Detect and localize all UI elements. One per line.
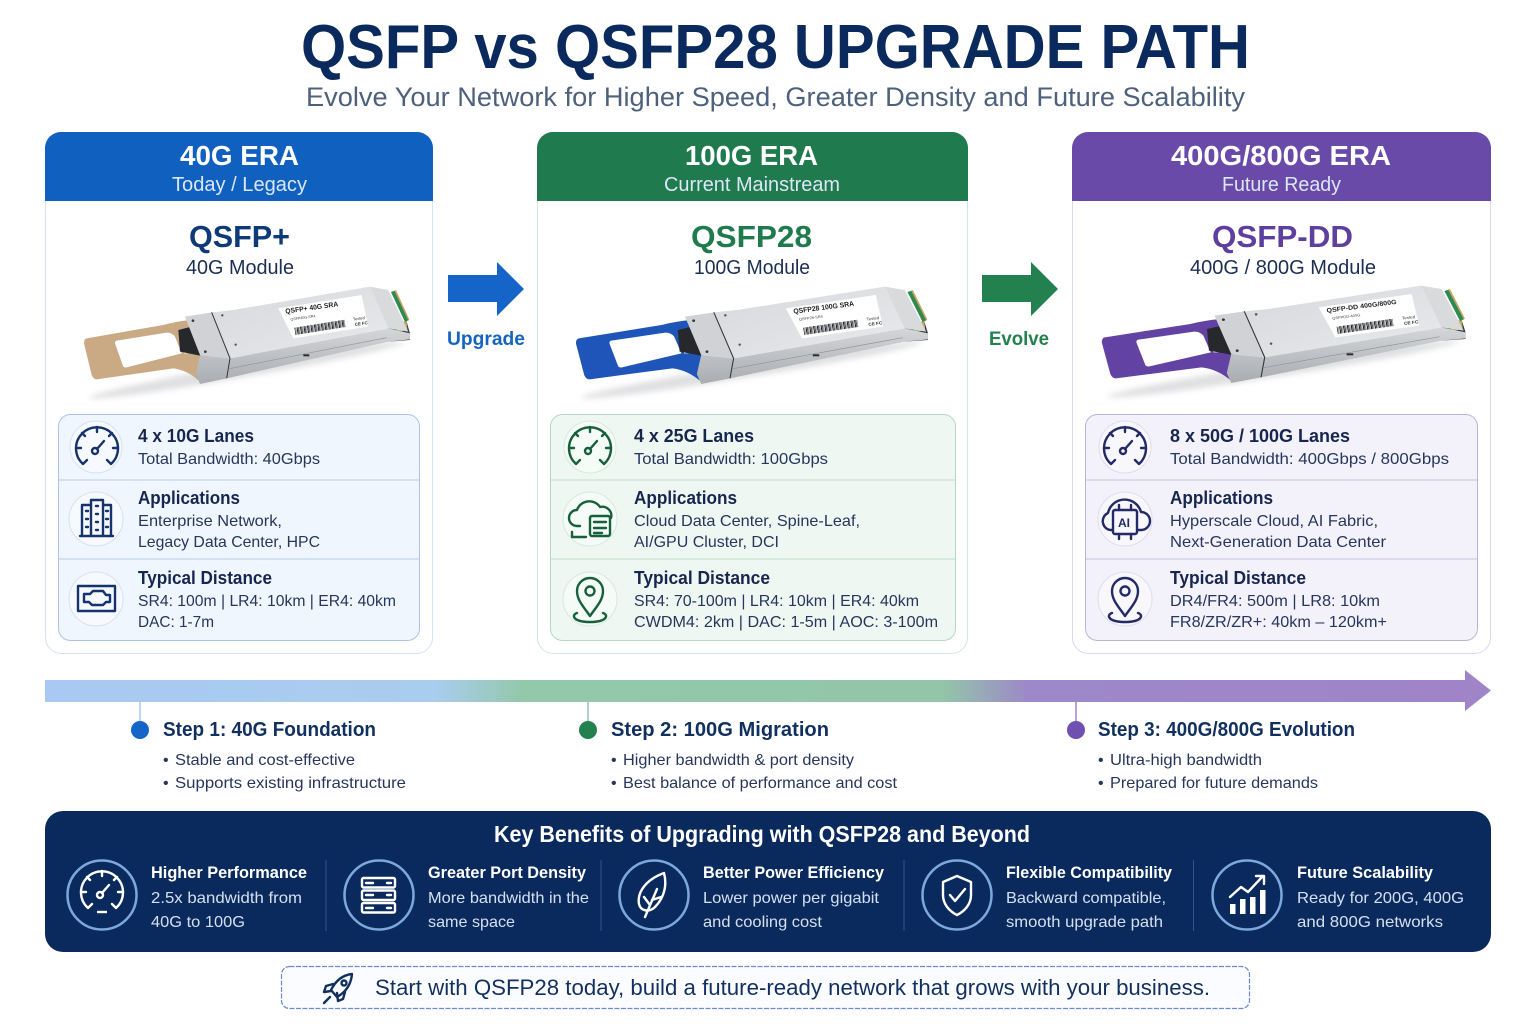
lanes text (1170, 426, 1449, 468)
title: QSFP vs QSFP28 UPGRADE PATH (301, 13, 1250, 82)
icon: circuit board (69, 572, 123, 626)
distance text: SR4: 100m | LR4: 10km | ER4: 40km (138, 593, 396, 610)
step 3: Ultra-high bandwidth (1110, 752, 1262, 769)
module type: 100G Module (694, 257, 810, 279)
module image: QSFP+ (84, 287, 410, 404)
step 2: Higher bandwidth & port density (623, 752, 854, 769)
applications text: Enterprise Network, (138, 513, 282, 530)
step 3: • (1098, 775, 1104, 792)
benefit: flexible compatibility (922, 860, 1173, 931)
benefit: higher performance: Higher Performance (151, 863, 307, 882)
timeline arrow (45, 670, 1491, 711)
lanes text (138, 426, 320, 468)
applications text: Next-Generation Data Center (1170, 534, 1387, 551)
lanes text: Total Bandwidth: 400Gbps / 800Gbps (1170, 451, 1449, 468)
icon: buildings (69, 492, 123, 546)
panel: 100G era (537, 132, 968, 654)
distance text: Typical Distance (634, 568, 770, 588)
callout: call to action (282, 966, 1250, 1008)
header: 100G era (537, 132, 968, 201)
applications text: AI/GPU Cluster, DCI (634, 534, 779, 551)
benefit: higher performance: 2.5x bandwidth from (151, 890, 302, 907)
step 1 (131, 702, 406, 792)
step 2: • (611, 775, 617, 792)
icon: cloud server (563, 492, 617, 546)
distance text: Typical Distance (1170, 568, 1306, 588)
lanes text: Total Bandwidth: 100Gbps (634, 451, 828, 468)
module name: QSFP+: QSFP+ (189, 219, 290, 254)
header: 40G era (45, 132, 433, 201)
step 2: • (611, 752, 617, 769)
lanes text: 4 x 25G Lanes (634, 426, 754, 446)
applications text: Applications (634, 488, 737, 508)
step 1: • (163, 775, 169, 792)
distance text (1170, 568, 1387, 631)
step 2: Best balance of performance and cost (623, 775, 898, 792)
distance text: SR4: 70-100m | LR4: 10km | ER4: 40km (634, 593, 919, 610)
specs: 100G (550, 414, 956, 640)
arrow: upgrade: Upgrade (447, 329, 525, 350)
step 1: Stable and cost-effective (175, 752, 355, 769)
header: 400G/800G era: Future Ready (1222, 174, 1341, 196)
benefit: greater port density: Greater Port Density (428, 863, 587, 882)
distance text: DR4/FR4: 500m | LR8: 10km (1170, 593, 1380, 610)
step 2 (579, 702, 898, 792)
distance text: FR8/ZR/ZR+: 40km – 120km+ (1170, 614, 1387, 631)
distance text (634, 568, 938, 631)
module image: QSFP-DD: QSFP-DD 400G/800G (1326, 299, 1397, 315)
benefit: flexible compatibility: smooth upgrade path (1006, 914, 1163, 931)
header: 40G era: 40G ERA (180, 140, 299, 171)
applications text: Applications (1170, 488, 1273, 508)
benefit: future scalability: Ready for 200G, 400G (1297, 890, 1464, 907)
arrow: evolve (982, 262, 1058, 350)
benefit: higher performance: 40G to 100G (151, 914, 245, 931)
benefit: better power efficiency: Lower power per gigabit (703, 890, 880, 907)
panel: 400G/800G era (1072, 132, 1491, 654)
benefit: better power efficiency: Better Power Efficiency (703, 863, 885, 882)
header: 400G/800G era (1072, 132, 1491, 201)
step 2: Step 2: 100G Migration (611, 719, 829, 741)
module type: 400G / 800G Module (1190, 257, 1376, 279)
distance text: CWDM4: 2km | DAC: 1-5m | AOC: 3-100m (634, 614, 938, 631)
module image: QSFP28 (576, 287, 928, 404)
header: 100G era: Current Mainstream (664, 174, 840, 196)
lanes text (634, 426, 828, 468)
module image: QSFP-DD: QSFPDD-400G (1332, 312, 1361, 321)
benefit: better power efficiency (620, 860, 885, 931)
icon: rocket (324, 974, 352, 1003)
benefit: future scalability: Future Scalability (1297, 863, 1434, 882)
module image: QSFP+: QSFP40G-SR4 (290, 314, 316, 322)
benefits heading: Key Benefits of Upgrading with QSFP28 and Beyond (494, 821, 1030, 847)
distance text: Typical Distance (138, 568, 272, 588)
applications text: Applications (138, 488, 240, 508)
module image: QSFP28: QSFP28-SR4 (799, 315, 823, 322)
module image: QSFP28: Tested (866, 315, 880, 322)
benefit: greater port density: same space (428, 914, 515, 931)
icon: gauge (564, 421, 616, 473)
module image: QSFP+: Tested (353, 315, 365, 322)
arrow: evolve: Evolve (989, 329, 1049, 350)
lanes text: Total Bandwidth: 40Gbps (138, 451, 320, 468)
benefit: flexible compatibility: Backward compatible, (1006, 890, 1166, 907)
applications text (138, 488, 320, 551)
header: 400G/800G era: 400G/800G ERA (1171, 140, 1391, 171)
applications text: Hyperscale Cloud, AI Fabric, (1170, 513, 1378, 530)
benefit: flexible compatibility: Flexible Compatibility (1006, 863, 1173, 882)
module image: QSFP-DD: Tested (1402, 314, 1416, 321)
benefit: better power efficiency: and cooling cost (703, 914, 823, 931)
step 1: Step 1: 40G Foundation (163, 719, 376, 741)
applications text (634, 488, 860, 551)
module image: QSFP+: CE FC (354, 320, 368, 327)
module name: QSFP-DD: QSFP-DD (1212, 219, 1353, 254)
lanes text: 8 x 50G / 100G Lanes (1170, 426, 1350, 446)
applications text: Cloud Data Center, Spine-Leaf, (634, 513, 860, 530)
specs: 400G/800G (1086, 414, 1478, 640)
step 1: • (163, 752, 169, 769)
benefit: greater port density: More bandwidth in the (428, 890, 589, 907)
module image: QSFP+: QSFP+ 40G SRA (285, 301, 339, 316)
benefit: future scalability (1212, 860, 1464, 931)
module image: QSFP28: QSFP28 100G SRA (793, 299, 855, 316)
step 1: Supports existing infrastructure (175, 775, 406, 792)
specs: 40G (58, 414, 420, 640)
call to action text: Start with QSFP28 today, build a future-ready network that grows with your business. (375, 975, 1210, 1000)
distance text: DAC: 1-7m (138, 614, 214, 631)
arrow: upgrade (447, 262, 525, 350)
step 3 (1067, 702, 1355, 792)
icon: location pin (563, 572, 617, 626)
benefit: higher performance (68, 860, 307, 931)
header: 40G era: Today / Legacy (172, 174, 307, 196)
icon: AI cloud: AI (1118, 516, 1130, 530)
icon: gauge (70, 421, 122, 473)
benefit: greater port density (344, 860, 589, 931)
applications text: Legacy Data Center, HPC (138, 534, 320, 551)
panel: 40G era (45, 132, 433, 654)
icon: location pin (1098, 572, 1152, 626)
icon: gauge (1099, 421, 1151, 473)
header: 100G era: 100G ERA (685, 140, 818, 171)
step 3: Prepared for future demands (1110, 775, 1318, 792)
icon: AI cloud (1098, 492, 1152, 546)
step 3: Step 3: 400G/800G Evolution (1098, 719, 1355, 741)
applications text (1170, 488, 1387, 551)
lanes text: 4 x 10G Lanes (138, 426, 254, 446)
module image: QSFP28: CE FC (868, 320, 883, 327)
module name: QSFP28: QSFP28 (691, 219, 812, 254)
module image: QSFP-DD (1102, 286, 1466, 403)
panel: key benefits (45, 811, 1491, 952)
subtitle: Evolve Your Network for Higher Speed, Greater Density and Future Scalability (306, 82, 1245, 112)
module type: 40G Module (186, 257, 294, 279)
distance text (138, 568, 396, 631)
step 3: • (1098, 752, 1104, 769)
module image: QSFP-DD: CE FC (1404, 319, 1419, 326)
benefit: future scalability: and 800G networks (1297, 914, 1443, 931)
